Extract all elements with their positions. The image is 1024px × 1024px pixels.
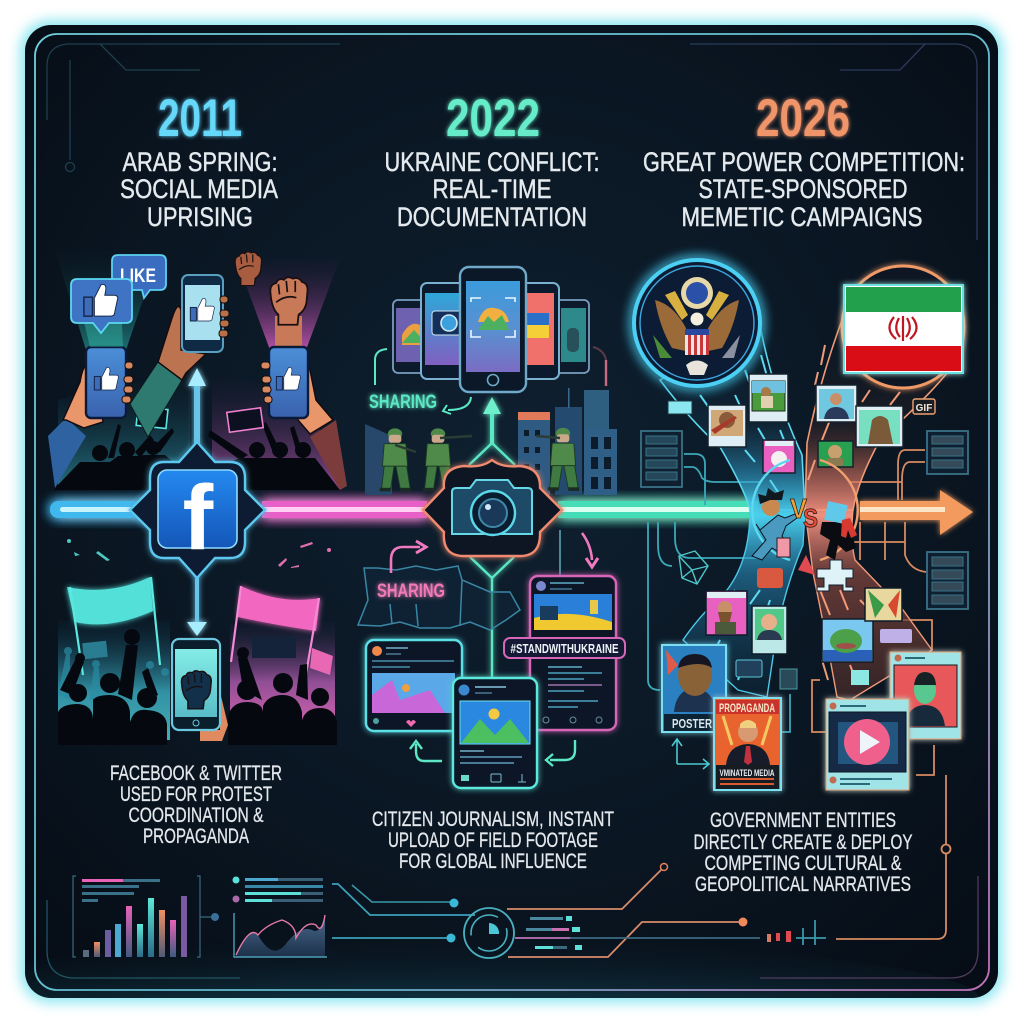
hashtag pill: #STANDWITHUKRAINE — [510, 641, 619, 656]
small pink card — [777, 538, 790, 557]
teal beam — [55, 250, 160, 350]
hashtag pill — [504, 638, 625, 658]
cyan streaks — [700, 355, 790, 680]
scene: 2026 — [634, 260, 968, 939]
phone 1 — [393, 300, 433, 373]
scene: 2011 flags and crowd — [58, 539, 337, 745]
node: camera — [423, 443, 562, 677]
title 2026 — [643, 147, 965, 232]
like bubble — [112, 255, 166, 298]
chat bubble — [736, 660, 762, 677]
phone 4 — [520, 283, 559, 379]
text 2022 body: UPLOAD OF FIELD FOOTAGE — [388, 829, 598, 852]
red meme icon — [757, 568, 783, 588]
hand right — [298, 362, 333, 434]
text 2022 body: CITIZEN JOURNALISM, INSTANT — [372, 808, 614, 831]
meme card pepe — [822, 619, 873, 662]
propaganda poster: PROPAGANDA — [719, 701, 775, 715]
confetti left — [67, 539, 110, 561]
buildings left — [365, 424, 392, 495]
meme figure white — [817, 560, 853, 591]
crowd glow right — [212, 370, 340, 490]
phone 5 — [552, 300, 589, 373]
Y connector — [469, 443, 515, 677]
meme card pink — [763, 440, 795, 473]
like bubble: LIKE — [120, 266, 156, 287]
timeline — [50, 490, 973, 535]
arrow pink right — [582, 533, 598, 567]
curved arrows — [375, 347, 606, 414]
soldier 2 — [423, 428, 472, 491]
hand middle — [158, 306, 206, 380]
vs label — [790, 493, 818, 533]
column 2026 heading — [643, 89, 965, 232]
fingers left phone — [122, 362, 133, 403]
title 2011: UPRISING — [147, 202, 253, 232]
phone middle — [182, 275, 223, 352]
meme card creature — [856, 406, 903, 447]
background crowd — [58, 647, 169, 700]
text 2022 body: FOR GLOBAL INFLUENCE — [399, 850, 587, 873]
segment pink — [262, 501, 427, 518]
orange trace with node — [836, 775, 950, 939]
phone with fist — [172, 639, 228, 741]
year 2022: 2022 — [446, 89, 540, 148]
text 2011 body: USED FOR PROTEST — [120, 783, 272, 806]
soldier 3 — [536, 428, 579, 491]
phone right — [269, 347, 308, 418]
fighter left — [752, 488, 797, 560]
crowd right — [228, 647, 337, 745]
soldier 1 — [380, 428, 416, 491]
title 2011 — [120, 147, 278, 232]
central ring orange — [820, 460, 858, 560]
server right top — [927, 431, 968, 474]
title 2022: UKRAINE CONFLICT: — [384, 147, 600, 177]
text 2026 body: GEOPOLITICAL NARRATIVES — [695, 873, 911, 896]
iran flag — [844, 285, 963, 373]
small red arrow icon — [798, 555, 815, 575]
meme card old man — [752, 606, 787, 654]
meme card bearded — [706, 591, 747, 635]
thumb middle phone — [190, 298, 214, 321]
seal — [634, 260, 760, 386]
thumb bubble — [71, 279, 132, 333]
camera icon — [452, 480, 532, 535]
facebook f: f — [183, 467, 214, 569]
up arrow — [483, 397, 501, 444]
bar chart — [73, 876, 219, 957]
swoosh orange top — [805, 320, 947, 510]
text 2011 body: FACEBOOK & TWITTER — [110, 762, 282, 785]
meme card green small — [818, 441, 853, 467]
small dark flag — [252, 636, 296, 658]
meme card man — [816, 385, 857, 422]
text 2011 body: COORDINATION & — [128, 804, 264, 827]
teal flag poles — [70, 577, 160, 675]
connector — [559, 530, 561, 575]
title 2011: ARAB SPRING: — [122, 147, 278, 177]
video post — [826, 699, 909, 790]
title 2022: DOCUMENTATION — [397, 202, 587, 232]
red post — [890, 652, 961, 739]
bottom glow — [26, 965, 979, 998]
sleeve middle — [130, 362, 182, 437]
fighter right — [820, 501, 857, 560]
axis arrow — [672, 739, 709, 769]
poster: POSTER — [672, 716, 712, 731]
sign pink — [227, 408, 263, 432]
glow background left — [58, 620, 170, 740]
orange ring — [842, 266, 964, 388]
tag — [668, 401, 692, 414]
year 2026: 2026 — [756, 89, 850, 148]
segment green — [558, 501, 758, 518]
phone left — [86, 347, 126, 418]
phone center — [460, 267, 526, 392]
down arrow — [187, 576, 207, 636]
text 2011 body — [110, 762, 282, 848]
title 2022 — [384, 147, 600, 232]
crowd left — [55, 424, 182, 490]
text 2022 body — [372, 808, 614, 873]
small fist — [235, 252, 262, 286]
small tile — [780, 669, 797, 689]
propaganda poster: VMINATED MEDIA — [720, 768, 775, 778]
beam from bubble — [84, 322, 123, 347]
text 2026 body — [694, 809, 912, 896]
text 2011 body: PROPAGANDA — [143, 825, 249, 848]
network icon — [679, 551, 708, 584]
column 2022 heading — [384, 89, 600, 232]
post center — [453, 678, 537, 788]
phone 2 — [421, 283, 469, 379]
sharing label pink: SHARING — [377, 581, 445, 602]
circuit traces — [648, 450, 934, 775]
up arrow — [188, 368, 206, 445]
vs label: V — [790, 493, 807, 524]
central ring — [752, 460, 790, 560]
orange streaks — [808, 345, 900, 685]
title 2026: STATE-SPONSORED — [698, 174, 908, 204]
return arrows — [410, 740, 575, 766]
crowd right — [208, 422, 340, 490]
small pink flag — [310, 648, 333, 675]
title 2011: SOCIAL MEDIA — [120, 174, 278, 204]
buildings right — [518, 388, 617, 495]
fingers middle phone — [219, 296, 229, 337]
note tag — [851, 670, 869, 685]
fingers right phone — [261, 362, 272, 403]
text 2026 body: COMPETING CULTURAL & — [704, 852, 902, 875]
scene: 2022 bottom — [358, 530, 625, 788]
thumb right phone — [276, 367, 300, 390]
poster — [662, 645, 726, 732]
title 2022: REAL-TIME — [432, 174, 552, 204]
propaganda poster — [714, 698, 781, 790]
server right bottom — [927, 552, 968, 609]
server left — [641, 431, 682, 487]
crowd glow left — [58, 370, 190, 490]
post right content — [534, 581, 612, 723]
pink flag — [238, 586, 320, 631]
scene: 2022 top — [365, 267, 617, 495]
node: facebook — [130, 368, 265, 636]
pink beam — [236, 258, 340, 350]
swoosh cyan bottom — [683, 510, 805, 697]
large fist — [270, 277, 308, 349]
map — [358, 566, 520, 630]
circuit dial — [332, 864, 826, 958]
scene: 2011 phones and fists — [48, 250, 347, 490]
meme card flag faces — [865, 588, 902, 621]
post right — [530, 576, 616, 730]
chat tag — [880, 629, 912, 643]
sleeve left — [48, 418, 86, 488]
swoosh orange bottom — [805, 510, 932, 700]
glow background right — [230, 622, 335, 722]
segment blue — [50, 501, 155, 518]
arrow orange — [860, 490, 973, 535]
thumb left phone — [94, 367, 118, 390]
sleeve right — [310, 420, 347, 490]
arrow pink left — [391, 541, 426, 573]
gif tag: GIF — [916, 403, 932, 414]
post left — [366, 640, 462, 731]
swoosh cyan top — [660, 325, 805, 510]
title 2026: MEMETIC CAMPAIGNS — [682, 202, 922, 232]
vs label: S — [803, 503, 818, 533]
node outline — [423, 460, 562, 556]
gif tag — [913, 399, 935, 414]
meme card green — [749, 374, 788, 422]
text 2026 body: GOVERNMENT ENTITIES — [710, 809, 896, 832]
node outline — [130, 442, 265, 578]
confetti right — [278, 542, 331, 568]
small teal flag — [82, 641, 108, 659]
teal flag — [67, 577, 153, 624]
sharing label teal: SHARING — [369, 392, 437, 413]
text 2026 body: DIRECTLY CREATE & DEPLOY — [694, 831, 912, 854]
sign teal — [136, 406, 168, 429]
column 2011 heading — [120, 89, 278, 232]
facebook square — [158, 470, 237, 548]
meme card tank — [708, 405, 746, 447]
hand left — [63, 367, 103, 428]
crowd left — [58, 629, 167, 745]
pink flag poles — [231, 586, 319, 680]
line chart — [232, 876, 327, 957]
year 2011: 2011 — [158, 89, 242, 148]
